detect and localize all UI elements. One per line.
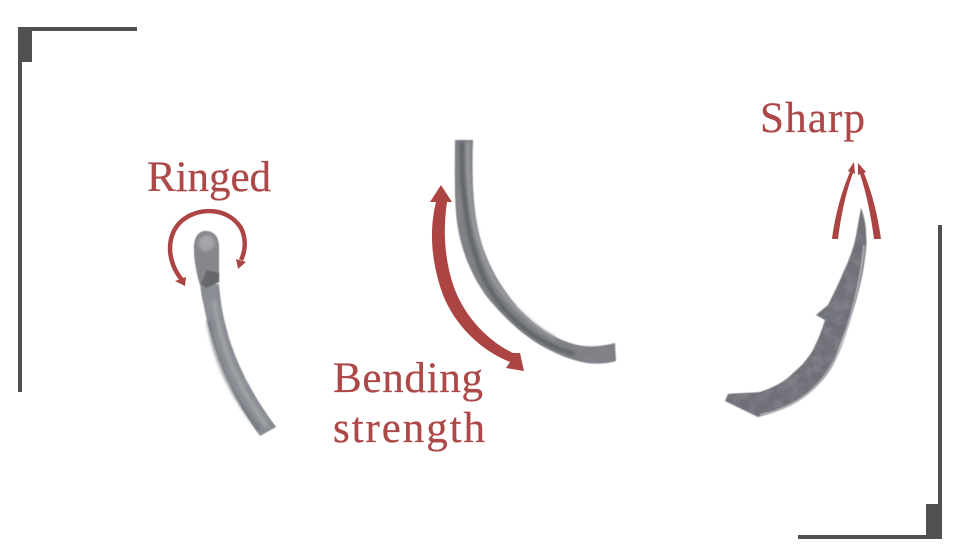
label: Ringed: Ringed (147, 154, 271, 201)
label: Bending strength: Bending (333, 355, 483, 402)
arrow: right point converge (858, 163, 881, 239)
frame: bottom-right bracket (798, 225, 942, 539)
hook: ringed eye (194, 231, 276, 436)
label: Bending strength: strength (333, 405, 485, 452)
arrow: left point converge (832, 162, 855, 239)
hook: sharp point with barb (725, 208, 866, 417)
label: Sharp: Sharp (760, 95, 865, 142)
arrow: bending strength double-headed (430, 185, 524, 371)
arrow: ring rotation (170, 211, 246, 286)
label: Bending strength (333, 355, 485, 452)
hook: bending strength shank (455, 140, 616, 364)
frame: top-left bracket (18, 27, 137, 392)
